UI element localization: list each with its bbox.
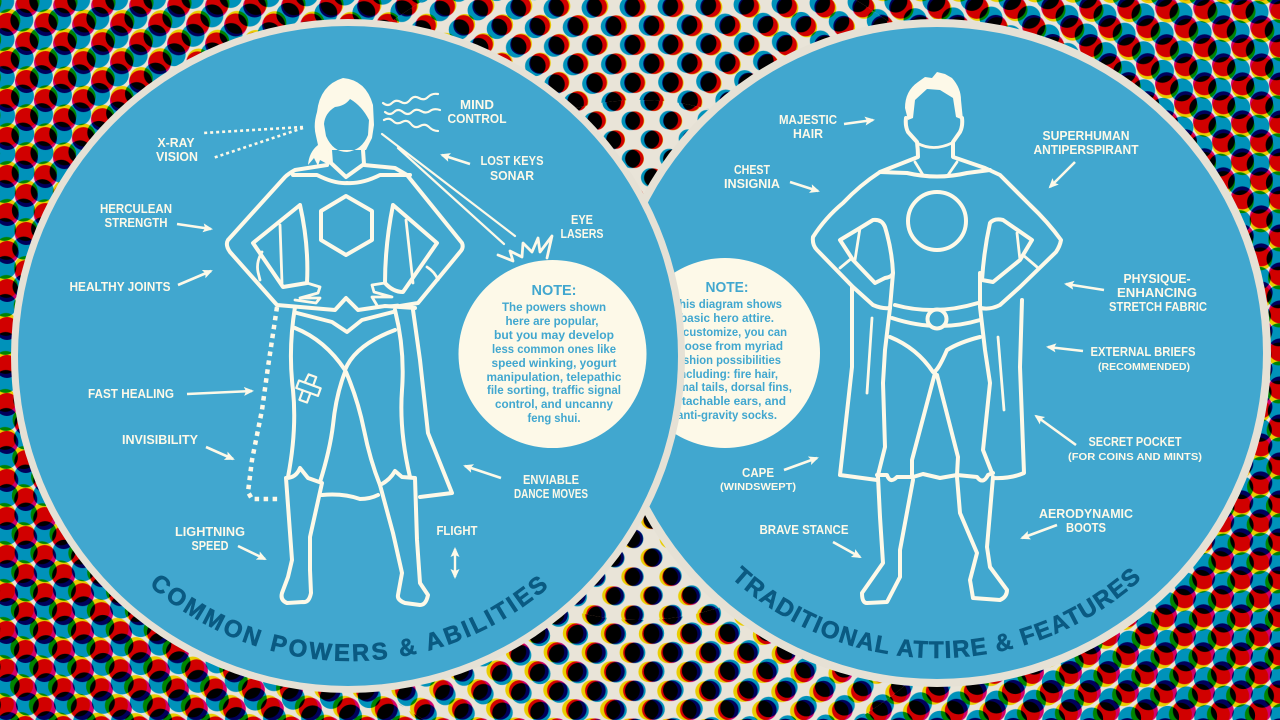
labels: right panel callouts: CAPE [742,466,774,480]
note: basic hero attire: NOTE: [706,280,748,296]
panel: traditional attire and features [645,19,1271,687]
labels: left panel callouts: LIGHTNING [175,525,245,539]
labels: right panel callouts: (FOR COINS AND MINTS) [1068,451,1202,463]
note: basic hero attire: including: fire hair, [676,367,778,381]
figure: female hero outline [227,78,463,605]
arrows: left panel callouts [177,155,501,577]
labels: right panel callouts: EXTERNAL BRIEFS [1090,345,1196,359]
labels: left panel callouts: MIND [460,98,494,112]
labels: left panel callouts: LOST KEYS [480,154,544,168]
labels: right panel callouts: BOOTS [1066,521,1106,535]
note: popular powers: manipulation, telepathic [486,370,622,384]
note: basic hero attire: choose from myriad [671,339,783,353]
labels: right panel callouts [720,113,1207,537]
labels: left panel callouts: EYE [571,213,593,227]
labels: right panel callouts: STRETCH FABRIC [1109,300,1207,314]
labels: left panel callouts [70,98,604,553]
labels: right panel callouts: AERODYNAMIC [1039,507,1133,521]
note: popular powers [458,260,646,448]
labels: right panel callouts: (RECOMMENDED) [1098,361,1190,373]
labels: left panel callouts: VISION [156,150,198,164]
note: basic hero attire: This diagram shows [672,297,782,311]
panel: common powers and abilities [11,19,685,693]
note: popular powers: less common ones like [492,342,616,356]
hexagon insignia [321,196,372,255]
labels: left panel callouts: DANCE MOVES [514,487,588,501]
labels: left panel callouts: SONAR [490,169,534,183]
labels: right panel callouts: ANTIPERSPIRANT [1034,143,1139,157]
figure: male hero outline [813,72,1061,603]
note: popular powers: The powers shown [502,300,606,314]
invisible cape dotted outline [248,307,280,499]
labels: right panel callouts: (WINDSWEPT) [720,481,796,493]
labels: right panel callouts: PHYSIQUE- [1124,272,1190,286]
labels: left panel callouts: ENVIABLE [523,473,579,487]
note: popular powers: but you may develop [494,328,614,342]
note: basic hero attire: animal tails, dorsal fins, [662,380,792,394]
note: basic hero attire [630,258,820,448]
labels: right panel callouts: MAJESTIC [779,113,837,127]
labels: left panel callouts: CONTROL [448,112,507,126]
icon: x-ray vision beams [203,127,303,158]
note: basic hero attire: To customize, you can [667,325,787,339]
labels: right panel callouts: BRAVE STANCE [760,523,848,537]
labels: right panel callouts: HAIR [793,127,823,141]
note: popular powers: NOTE: [532,283,576,299]
curved title: common powers and abilities: COMMON POWERS & ABILITIES [152,576,547,662]
labels: right panel callouts: SUPERHUMAN [1042,129,1130,143]
labels: left panel callouts: INVISIBILITY [122,433,199,447]
note: basic hero attire: anti-gravity socks. [677,408,777,422]
labels: left panel callouts: FLIGHT [436,524,478,538]
labels: left panel callouts: SPEED [192,539,228,553]
labels: right panel callouts: ENHANCING [1117,286,1197,300]
icon: eye lasers and burst [382,134,552,261]
note: popular powers: speed winking, yogurt [492,356,616,370]
note: popular powers: control, and uncanny [495,397,613,411]
icon: bandage [293,372,324,405]
curved title: traditional attire and features: TRADITIONAL ATTIRE & FEATURES [735,565,1140,658]
note: basic hero attire: basic hero attire. [680,311,774,325]
labels: left panel callouts: STRENGTH [104,216,168,230]
labels: left panel callouts: LASERS [560,227,604,241]
note: basic hero attire: fashion possibilities [673,353,781,367]
icon: mind control waves [383,94,440,131]
chest insignia circle [908,192,966,250]
note: popular powers: file sorting, traffic signal [487,383,621,397]
labels: left panel callouts: FAST HEALING [88,387,174,401]
labels: left panel callouts: HERCULEAN [100,202,172,216]
labels: right panel callouts: CHEST [734,163,770,177]
note: popular powers: here are popular, [506,314,598,328]
arrows: right panel callouts [784,120,1104,557]
labels: left panel callouts: X-RAY [158,136,195,150]
labels: right panel callouts: INSIGNIA [724,177,780,191]
note: popular powers: feng shui. [528,411,580,425]
labels: left panel callouts: HEALTHY JOINTS [70,280,170,294]
labels: right panel callouts: SECRET POCKET [1088,435,1182,449]
note: basic hero attire: detachable ears, and [668,394,786,408]
